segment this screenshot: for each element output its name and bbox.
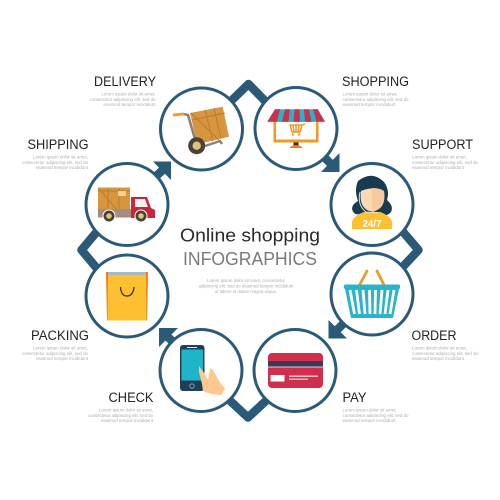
icon: credit card [268,353,323,388]
label: delivery: eiusmod tempor incididunt [104,102,156,107]
icon: smartphone with hand [180,345,225,395]
label: packing: eiusmod tempor incididunt [36,356,89,361]
circle: shipping [86,164,168,246]
label: order: ORDER [412,328,457,343]
label: delivery: Lorem ipsum dolor sit amet, [102,92,156,96]
label: shipping: eiusmod tempor incididunt [36,165,89,170]
label: shipping: SHIPPING [28,137,88,152]
connector: packing to shipping [82,228,100,272]
connector: delivery to shopping [228,84,268,104]
circle: packing [86,255,168,337]
connector: check to pay [226,397,270,418]
label: packing: consectetur adipiscing elit, sed do [22,351,88,356]
circle: check [160,330,242,412]
label: order: consectetur adipiscing elit, sed do [412,351,478,356]
arrow: check backwards to packing [159,328,178,347]
label: support: Lorem ipsum dolor sit amet, [412,154,467,160]
label: support: consectetur adipiscing elit, sed do [412,160,478,165]
title [180,224,320,269]
label: delivery: consectetur adipiscing elit, sed do [90,97,156,102]
label: packing [22,328,89,361]
connector: support to order [398,226,418,272]
icon: delivery truck [98,188,155,222]
circle: delivery [160,88,242,170]
label: delivery: DELIVERY [94,74,156,89]
circle: order [331,253,413,335]
label: check: CHECK [108,390,154,405]
icon: online shop monitor [267,109,325,148]
label: check: consectetur adipiscing elit, sed do [88,413,153,418]
icon: hand truck with crate [174,107,229,154]
center paragraph [198,278,294,294]
label: order [412,328,478,361]
circle: pay [254,330,336,412]
label: pay: PAY [342,390,366,405]
label: packing: Lorem ipsum dolor sit amet, [33,346,88,350]
icon: shopping bag [106,272,148,320]
label: pay [342,390,409,423]
label: shipping: consectetur adipiscing elit, sed do [22,160,88,165]
arrow: shopping to support [321,153,340,172]
label: check: eiusmod tempor incididunt [101,418,154,423]
label: packing: PACKING [31,328,89,343]
center paragraph: Lorem ipsum dolor sit amet, consectetur [207,278,285,283]
icon: shopping basket [344,271,400,318]
label: pay: Lorem ipsum dolor sit amet, [342,408,396,412]
circle: support [331,164,413,246]
icon: support agent 24/7: 24/7 [362,218,382,230]
label: check [88,390,154,423]
label: shopping: Lorem ipsum dolor sit amet, [342,92,398,96]
label: shipping [22,137,89,170]
label: support [412,137,478,170]
label: pay: eiusmod tempor incididunt [342,418,396,423]
heading: online shopping: Online shopping [180,224,320,246]
label: shopping: consectetur adipiscing elit, sed do [342,97,409,102]
center paragraph: ut labore et dolore magna aliqua. [215,289,277,294]
label: order: Lorem ipsum dolor sit amet, [412,346,467,350]
label: check: Lorem ipsum dolor sit amet, [99,408,153,412]
heading: infographics: INFOGRAPHICS [183,248,317,269]
label: shopping [342,74,409,107]
icon: support agent 24/7 [352,176,392,230]
label: shopping: SHOPPING [342,74,409,89]
label: shopping: eiusmod tempor incididunt [342,102,396,107]
label: shipping: Lorem ipsum dolor sit amet, [33,154,88,160]
label: order: eiusmod tempor incididunt [412,356,465,361]
circle: shopping [255,88,337,170]
label: support: SUPPORT [412,137,473,152]
arrow: shipping to delivery [152,162,171,180]
label: support: eiusmod tempor incididunt [412,165,465,170]
label: pay: consectetur adipiscing elit, sed do [342,413,409,418]
label: delivery [90,74,156,107]
center paragraph: adipiscing elit, sed do eiusmod tempor incididunt [198,284,294,288]
arrow: order to pay [328,320,347,338]
